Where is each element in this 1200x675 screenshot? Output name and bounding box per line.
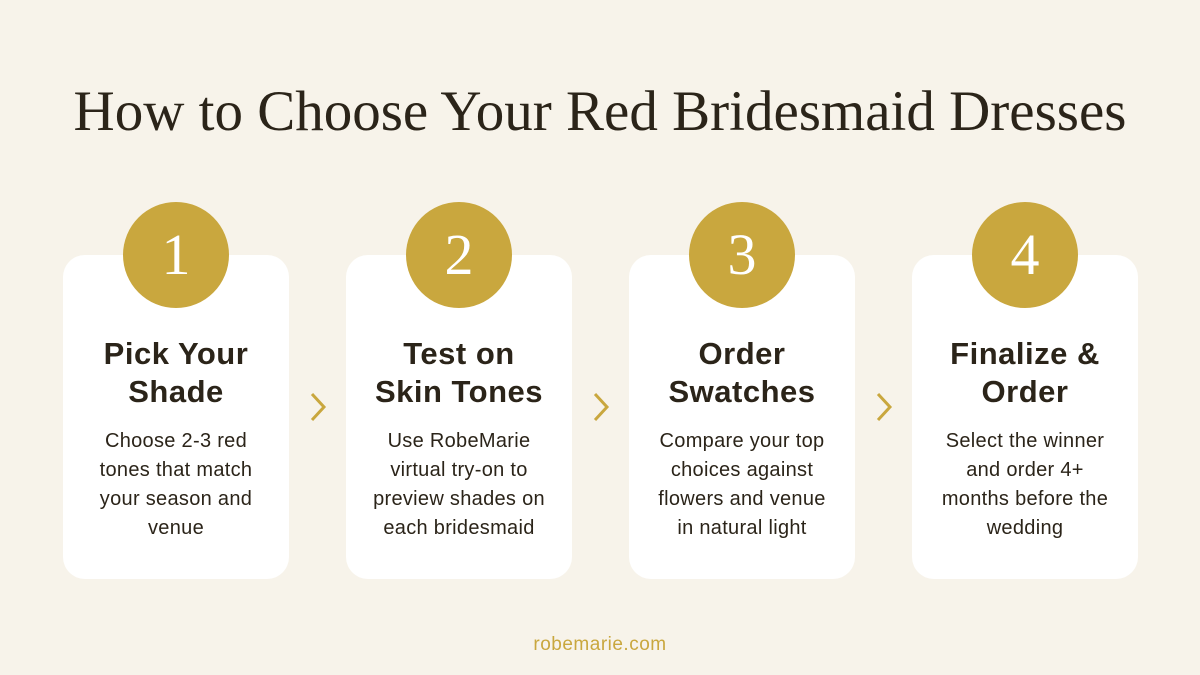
heading: step 4: Order	[982, 374, 1068, 409]
text: step 3: flowers and venue	[658, 488, 826, 510]
icon: number 3	[689, 202, 795, 308]
text: step 4: wedding	[987, 517, 1063, 539]
arrow 1	[311, 393, 326, 421]
text: step 4: Select the winner	[946, 430, 1104, 452]
text: step 2	[373, 430, 545, 539]
icon: number 4: 4	[1010, 222, 1040, 287]
footer: robemarie.com	[533, 634, 667, 655]
text: step 2: each bridesmaid	[383, 517, 535, 539]
text: step 2: preview shades on	[373, 488, 545, 510]
panel: step 2	[346, 255, 572, 579]
text: step 1: venue	[148, 517, 204, 539]
heading: step 2	[375, 336, 543, 409]
heading: step 3: Swatches	[668, 374, 816, 409]
icon: number 2	[406, 202, 512, 308]
arrow 3	[877, 393, 892, 421]
heading: step 4: Finalize &	[950, 336, 1100, 371]
panel: step 3	[629, 255, 855, 579]
icon: number 4	[972, 202, 1078, 308]
heading: step 1: Shade	[128, 374, 224, 409]
heading: step 1	[104, 336, 248, 409]
text: step 1: Choose 2-3 red	[105, 430, 247, 452]
heading: step 1: Pick Your	[104, 336, 248, 371]
heading: step 2: Skin Tones	[375, 374, 543, 409]
heading: step 3: Order	[699, 336, 785, 371]
heading: step 3	[668, 336, 816, 409]
text: step 4: and order 4+	[966, 459, 1084, 481]
text: step 1: your season and	[100, 488, 252, 510]
text: step 3: choices against	[671, 459, 813, 481]
heading: step 2: Test on	[403, 336, 515, 371]
icon: number 2: 2	[444, 222, 474, 287]
arrow 2	[594, 393, 609, 421]
icon: number 1	[123, 202, 229, 308]
text: step 2: virtual try-on to	[390, 459, 528, 481]
icon: number 3: 3	[728, 222, 756, 287]
text: step 3: Compare your top	[660, 430, 824, 452]
text: step 1: tones that match	[100, 459, 252, 481]
text: step 3	[658, 430, 826, 539]
heading: step 4	[950, 336, 1100, 409]
panel: step 4	[912, 255, 1138, 579]
text: step 4: months before the	[942, 488, 1108, 510]
text: step 3: in natural light	[677, 517, 807, 539]
icon: number 1: 1	[162, 222, 190, 287]
text: step 2: Use RobeMarie	[388, 430, 530, 452]
title: How to Choose Your Red Bridesmaid Dresses	[74, 80, 1126, 143]
text: step 4	[942, 430, 1108, 539]
panel: step 1	[63, 255, 289, 579]
text: step 1	[100, 430, 252, 539]
